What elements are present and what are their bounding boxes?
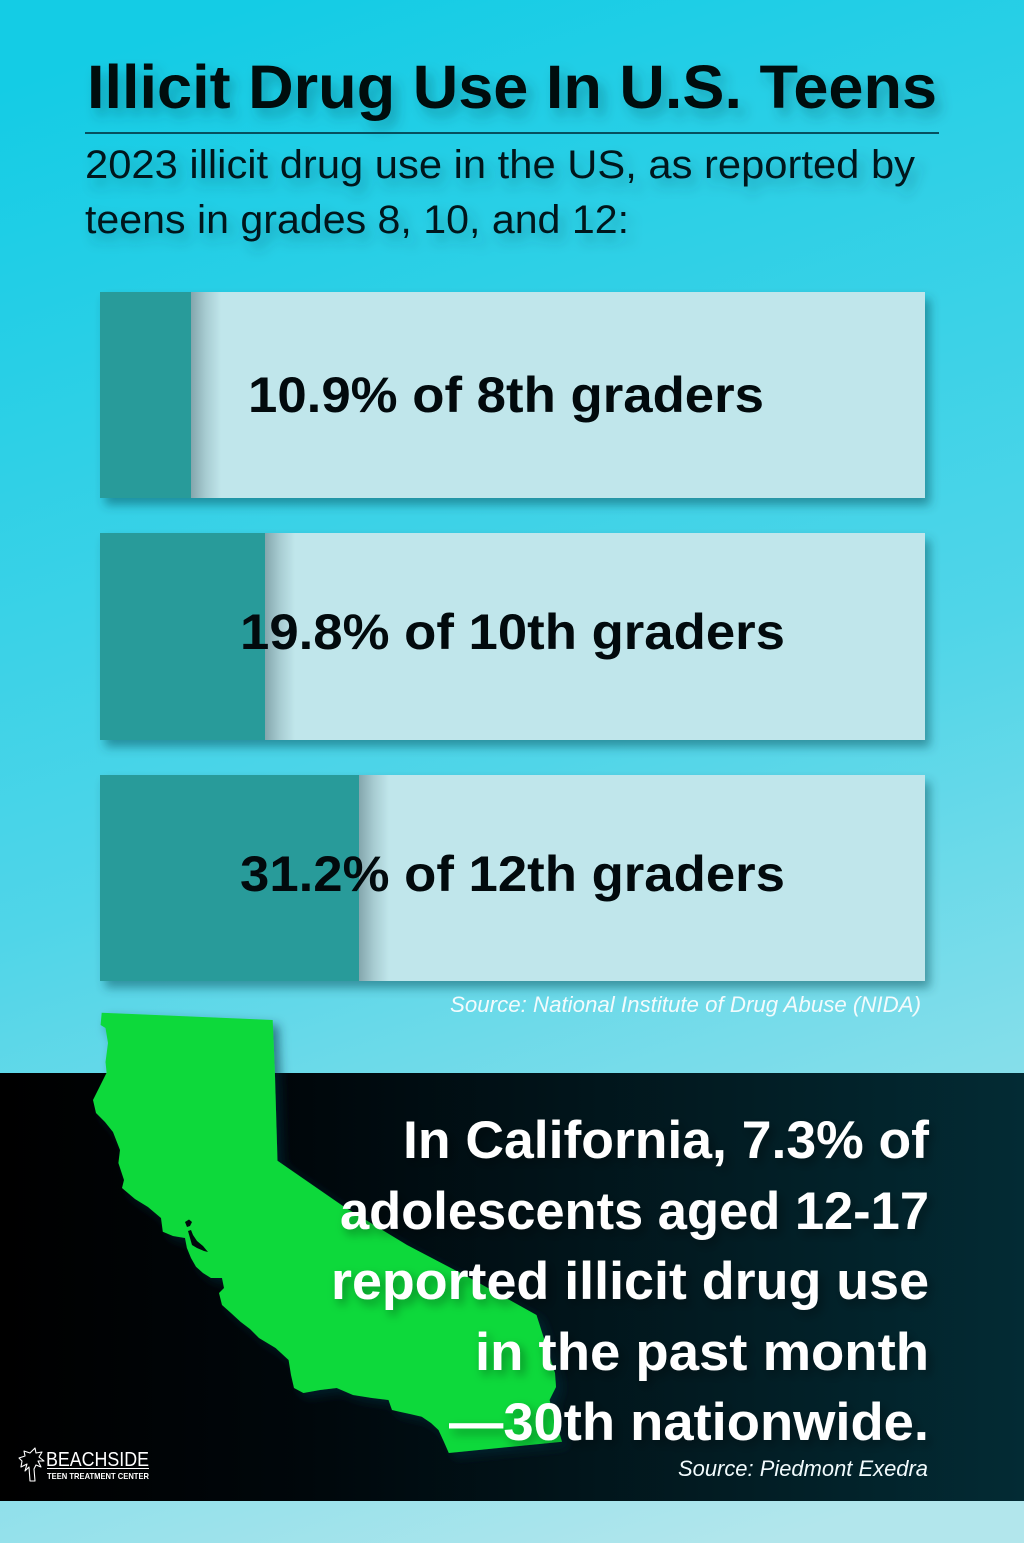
california statistic: —30th nationwide. bbox=[449, 1393, 929, 1452]
subtitle: teens in grades 8, 10, and 12: bbox=[85, 198, 629, 242]
california statistic bbox=[331, 1111, 929, 1452]
logo: Beachside: BEACHSIDE bbox=[46, 1449, 149, 1471]
california statistic: reported illicit drug use bbox=[331, 1252, 929, 1311]
bar: 12th graders: 31.2% of 12th graders bbox=[240, 846, 785, 902]
dark panel bbox=[0, 1073, 1024, 1501]
title: Illicit Drug Use In U.S. Teens bbox=[87, 53, 937, 121]
san francisco bay bbox=[185, 1220, 208, 1252]
california map bbox=[93, 1013, 562, 1453]
bar: 8th graders bbox=[100, 292, 925, 498]
california statistic: in the past month bbox=[475, 1323, 929, 1382]
logo: Beachside bbox=[19, 1448, 149, 1481]
california statistic: In California, 7.3% of bbox=[403, 1111, 929, 1170]
california statistic: adolescents aged 12-17 bbox=[340, 1182, 929, 1241]
source: Piedmont Exedra: Source: Piedmont Exedra bbox=[678, 1456, 928, 1481]
subtitle: 2023 illicit drug use in the US, as reported by bbox=[85, 143, 915, 187]
bar: 10th graders: 19.8% of 10th graders bbox=[240, 604, 785, 660]
subtitle bbox=[85, 143, 915, 242]
bar: 8th graders: 10.9% of 8th graders bbox=[248, 367, 764, 423]
bar: 12th graders bbox=[100, 775, 925, 981]
logo: Beachside: TEEN TREATMENT CENTER bbox=[47, 1471, 149, 1481]
source: NIDA: Source: National Institute of Drug Abuse (NIDA) bbox=[450, 992, 921, 1017]
title divider bbox=[85, 132, 939, 134]
bar: 10th graders bbox=[100, 533, 925, 740]
icon: palm tree bbox=[19, 1448, 44, 1481]
